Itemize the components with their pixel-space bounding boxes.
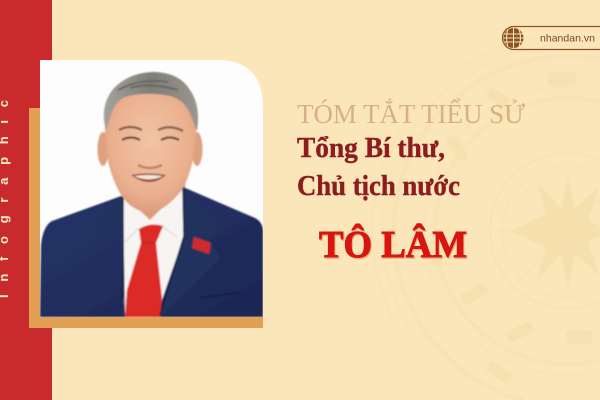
orange photo backing [29, 108, 263, 328]
neck [140, 183, 186, 220]
eyebrows [119, 127, 183, 131]
icon: globe [504, 28, 524, 48]
collar shading [125, 226, 177, 242]
eyebrow heading: TÓM TẮT TIỂU SỬ [297, 98, 526, 129]
bronze drum watermark [372, 35, 600, 400]
logo text: nhandan.vn [540, 32, 595, 44]
shirt [123, 187, 184, 317]
heading line 2: Chủ tịch nước [297, 171, 460, 202]
eyes [122, 138, 179, 140]
lapels [163, 286, 190, 312]
portrait figure [40, 72, 263, 317]
name: TÔ LÂM [319, 223, 467, 266]
nose [138, 149, 162, 167]
title block [297, 98, 526, 268]
logo pill [502, 26, 600, 50]
suit [40, 187, 263, 317]
heading line 1: Tổng Bí thư, [297, 133, 445, 164]
face [105, 90, 196, 213]
tie [125, 225, 163, 317]
mouth [131, 174, 166, 182]
pocket [200, 293, 238, 298]
photo backdrop [40, 60, 263, 317]
red side band [0, 0, 52, 400]
ears [98, 132, 108, 166]
portrait photo [40, 60, 263, 317]
lapel pin [192, 237, 211, 254]
hair [104, 72, 198, 131]
name: TÔ LÂM [320, 224, 468, 268]
